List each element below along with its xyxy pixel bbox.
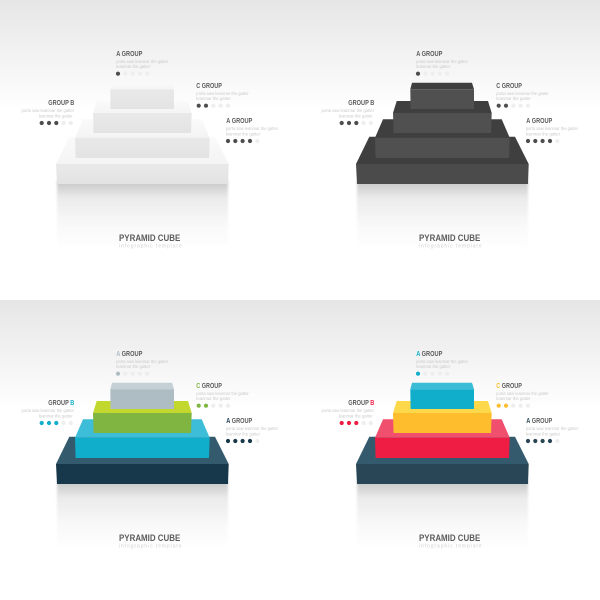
label: C group: leanmar the gatter [496,96,531,101]
label: A group top: porta saw leanmar the gatter [116,59,169,64]
third tier [75,119,210,158]
label: A group top: A GROUP [116,49,143,58]
label: A group right: porta saw leanmar the gatter [526,426,579,431]
title: infographic template [119,243,182,249]
label: C group [496,381,549,408]
label: group B: leanmar the gatter [39,414,73,418]
label: A group right: A GROUP [226,116,252,125]
panel background [0,0,300,110]
label: C group: leanmar the gatter [196,96,231,101]
panel: dark pyramid [300,0,600,250]
label: A group right: leanmar the gatter [526,432,561,436]
label: group B [22,98,75,125]
label: A group top [416,349,469,376]
label: A group right: A GROUP [226,416,252,425]
label: group B: GROUP B [348,98,374,107]
label: A group right: A GROUP [526,416,552,425]
label: group B: GROUP B [348,398,374,407]
panel: white pyramid [0,0,300,250]
title: PYRAMID CUBE [119,233,181,244]
label: A group top: porta saw leanmar the gatter [416,59,469,64]
label: A group right: porta saw leanmar the gatter [226,426,279,431]
label: A group top: leanmar the gatter [116,64,151,69]
label: group B: GROUP B [48,98,74,107]
base tier [56,437,229,484]
label: A group top: porta saw leanmar the gatter [416,359,469,364]
label: A group top: leanmar the gatter [416,364,451,369]
label: A group right: leanmar the gatter [226,132,261,136]
title: PYRAMID CUBE [119,533,181,544]
label: A group top: A GROUP [416,49,443,58]
label: group B: GROUP B [48,398,74,407]
label: C group: porta saw leanmar the gatter [196,391,249,396]
label: group B: leanmar the gatter [39,114,73,118]
label: group B: porta saw leanmar the gatter [22,108,75,113]
label: A group top [416,49,469,76]
label: A group right [226,116,279,143]
second tier [393,401,492,433]
label: C group: leanmar the gatter [196,396,231,401]
title [119,533,182,549]
label: A group top: A GROUP [116,349,143,358]
label: C group [196,381,249,408]
label: A group right [226,416,279,443]
second tier [393,101,492,133]
label: C group: C GROUP [496,81,522,90]
top tier [410,83,474,109]
label: A group top [116,49,169,76]
label: C group: porta saw leanmar the gatter [496,91,549,96]
label: group B: porta saw leanmar the gatter [22,408,75,413]
label: A group right: A GROUP [526,116,552,125]
title: PYRAMID CUBE [419,233,481,244]
panel: blue green pyramid [0,300,300,550]
reflection [357,481,528,550]
label: A group top: leanmar the gatter [416,64,451,69]
reflection [57,181,228,250]
title [119,233,182,249]
label: A group top: leanmar the gatter [116,364,151,369]
title [419,233,482,249]
label: C group: porta saw leanmar the gatter [496,391,549,396]
panel background [300,0,600,110]
label: C group: C GROUP [196,381,222,390]
reflection [357,181,528,250]
second tier [93,401,192,433]
panel: red yellow pyramid [300,300,600,550]
label: C group [196,81,249,108]
title: infographic template [419,243,482,249]
base tier [356,437,529,484]
base tier [356,137,529,184]
base tier [56,137,229,184]
top tier [110,83,174,109]
reflection [57,481,228,550]
label: C group [496,81,549,108]
label: group B: leanmar the gatter [339,414,373,418]
title: infographic template [119,543,182,549]
top tier [410,383,474,409]
label: A group top: porta saw leanmar the gatter [116,359,169,364]
label: A group right: leanmar the gatter [226,432,261,436]
top tier [110,383,174,409]
title [419,533,482,549]
label: group B: porta saw leanmar the gatter [322,108,375,113]
label: group B [322,98,375,125]
label: C group: porta saw leanmar the gatter [196,91,249,96]
label: A group right: porta saw leanmar the gatter [526,126,579,131]
label: C group: C GROUP [196,81,222,90]
label: A group right [526,116,579,143]
label: group B: porta saw leanmar the gatter [322,408,375,413]
label: C group: leanmar the gatter [496,396,531,401]
second tier [93,101,192,133]
panel background [300,300,600,410]
label: group B [22,398,75,425]
label: group B: leanmar the gatter [339,114,373,118]
title: infographic template [419,543,482,549]
third tier [375,119,510,158]
label: A group top [116,349,169,376]
panel background [0,300,300,410]
label: A group right: leanmar the gatter [526,132,561,136]
title: PYRAMID CUBE [419,533,481,544]
third tier [75,419,210,458]
label: group B [322,398,375,425]
label: C group: C GROUP [496,381,522,390]
label: A group top: A GROUP [416,349,443,358]
label: A group right: porta saw leanmar the gatter [226,126,279,131]
third tier [375,419,510,458]
label: A group right [526,416,579,443]
